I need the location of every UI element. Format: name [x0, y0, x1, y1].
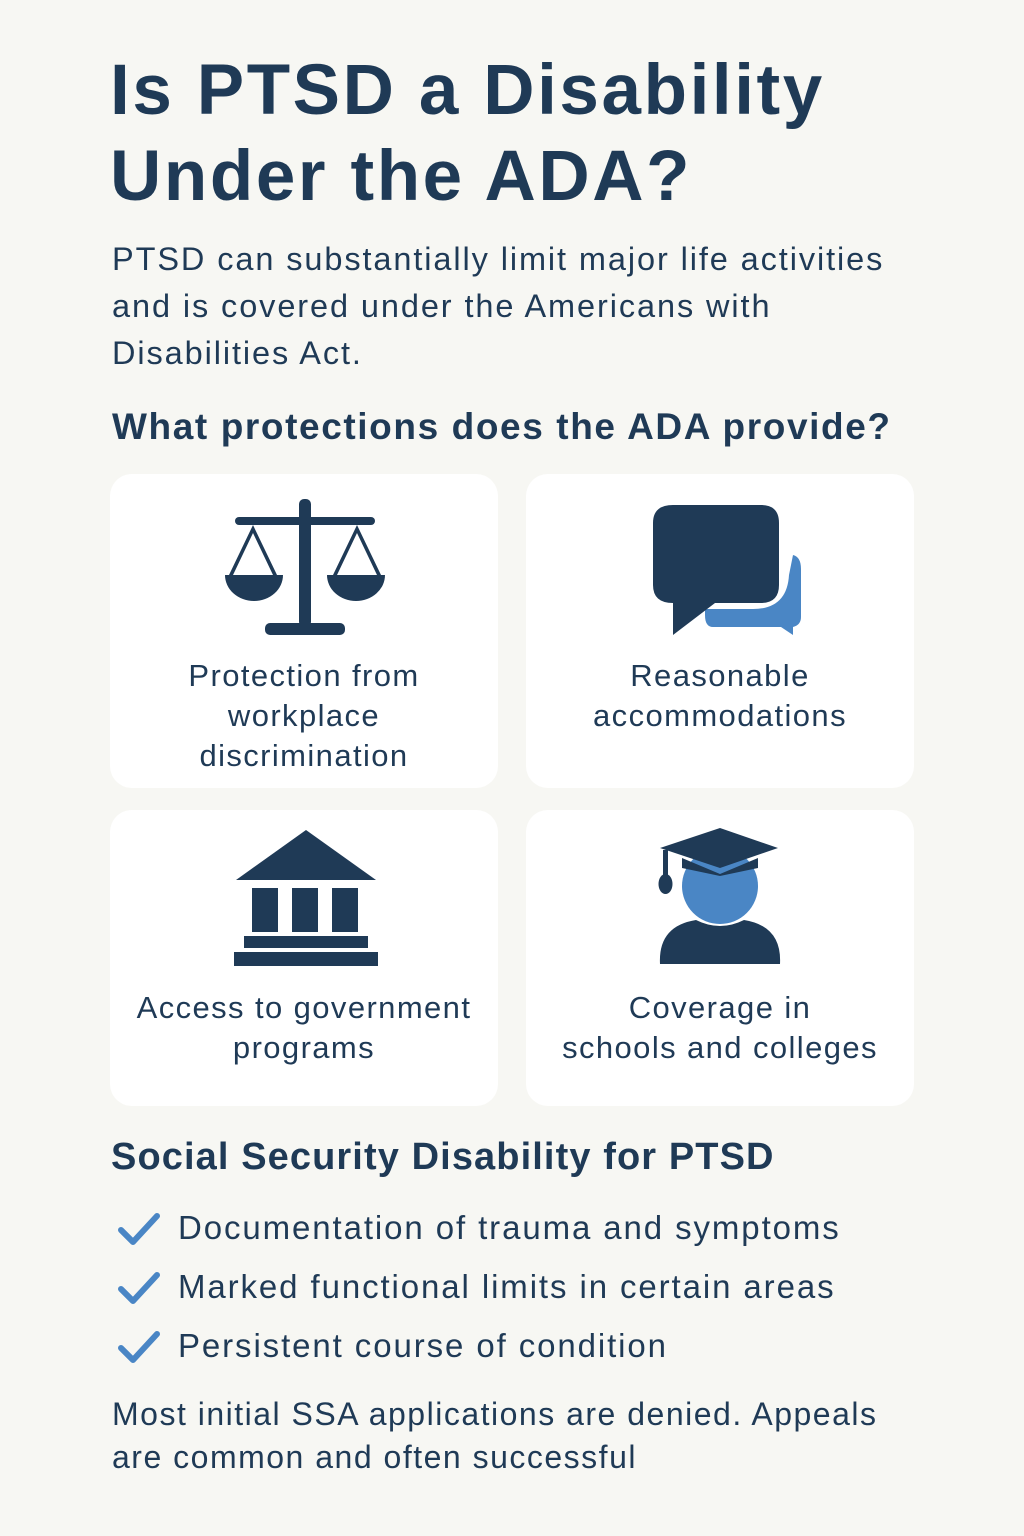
card: government programs [110, 810, 498, 1106]
text: workplace [228, 698, 380, 733]
icon: building [234, 830, 378, 966]
text [136, 990, 471, 1065]
text: programs [233, 1030, 375, 1065]
text: discrimination [199, 738, 409, 773]
text: Reasonable [630, 658, 810, 693]
heading: social security: Social Security Disability for PTSD [111, 1136, 775, 1178]
item 1 [118, 1209, 841, 1246]
intro text: PTSD can substantially limit major life activities [112, 241, 884, 277]
closing note: Most initial SSA applications are denied. Appeals [112, 1396, 877, 1432]
text [562, 990, 878, 1065]
closing note: are common and often successful [112, 1439, 637, 1475]
text: schools and colleges [562, 1030, 878, 1065]
checklist [118, 1209, 841, 1364]
text: Access to government [137, 990, 471, 1025]
heading: protections: What protections does the ADA provide? [112, 406, 892, 447]
title: Under the ADA? [110, 137, 692, 216]
item 2 [118, 1268, 835, 1305]
title: Is PTSD a Disability [110, 51, 825, 130]
intro text: Disabilities Act. [112, 335, 363, 371]
intro text [112, 241, 884, 371]
text [188, 658, 420, 773]
card: accommodations [526, 474, 914, 788]
item 3 [118, 1327, 668, 1364]
title [110, 51, 825, 216]
icon: chat bubbles [653, 505, 801, 635]
card: workplace discrimination [110, 474, 498, 788]
checklist: Marked functional limits in certain areas [178, 1268, 835, 1305]
text: Coverage in [629, 990, 811, 1025]
intro text: and is covered under the Americans with [112, 288, 771, 324]
card: schools [526, 810, 914, 1106]
icon: graduate [658, 828, 780, 964]
text: accommodations [593, 698, 847, 733]
checklist: Documentation of trauma and symptoms [178, 1209, 841, 1246]
icon: scales [225, 499, 385, 635]
checklist: Persistent course of condition [178, 1327, 668, 1364]
text [593, 658, 847, 733]
closing note [112, 1396, 877, 1475]
text: Protection from [188, 658, 420, 693]
